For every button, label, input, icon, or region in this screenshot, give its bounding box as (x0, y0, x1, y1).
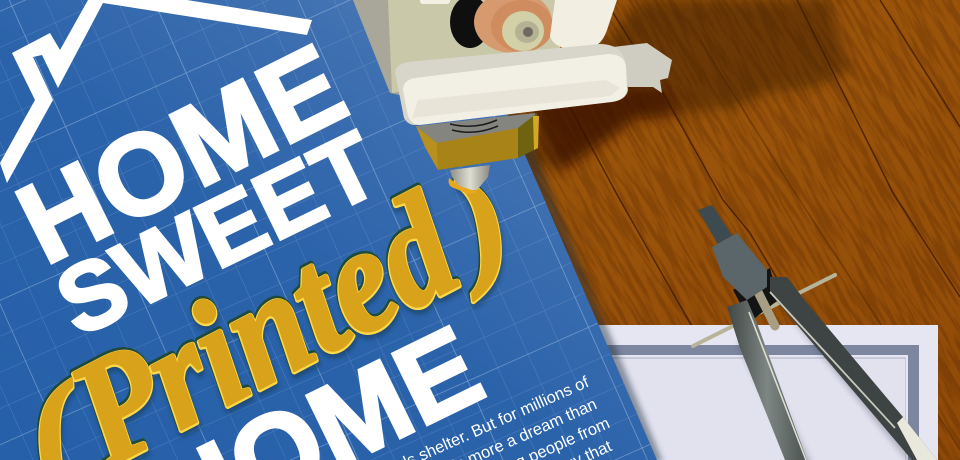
knurled wheel (758, 292, 775, 326)
paper sheet (598, 325, 938, 460)
brass nut (416, 126, 438, 170)
left leg (727, 300, 807, 460)
compass shadow (745, 305, 925, 460)
title: (Printed): ) (448, 145, 513, 303)
belt wheel (450, 0, 490, 48)
title: (Printed): ) (449, 149, 514, 307)
head (712, 233, 767, 300)
right leg steel tip (897, 417, 937, 460)
carriage side tab (613, 43, 672, 93)
handle (698, 205, 735, 248)
cross bar (693, 275, 835, 346)
title: HOME: HOME (0, 21, 364, 288)
3D printer head (353, 0, 672, 194)
icon: house roof outline (0, 0, 312, 183)
spring (450, 120, 498, 132)
top clip (420, 0, 450, 4)
nut top face (416, 113, 537, 143)
orange roller (474, 0, 552, 53)
title: (Printed): ) (448, 144, 513, 302)
drafting compass (693, 205, 937, 460)
carriage back (395, 44, 628, 125)
printer shadow on wood (530, 0, 850, 170)
title: (Printed): ) (447, 143, 512, 301)
printer frame (353, 0, 400, 95)
right leg (770, 277, 937, 460)
extruder nozzle (450, 165, 490, 190)
blueprint poster (0, 0, 663, 460)
white housing (550, 0, 617, 50)
roller hub (502, 11, 544, 51)
title: SWEET: SWEET (41, 112, 395, 357)
hinge gap (733, 268, 778, 322)
molten filament (449, 178, 478, 194)
carriage tray (403, 54, 627, 125)
